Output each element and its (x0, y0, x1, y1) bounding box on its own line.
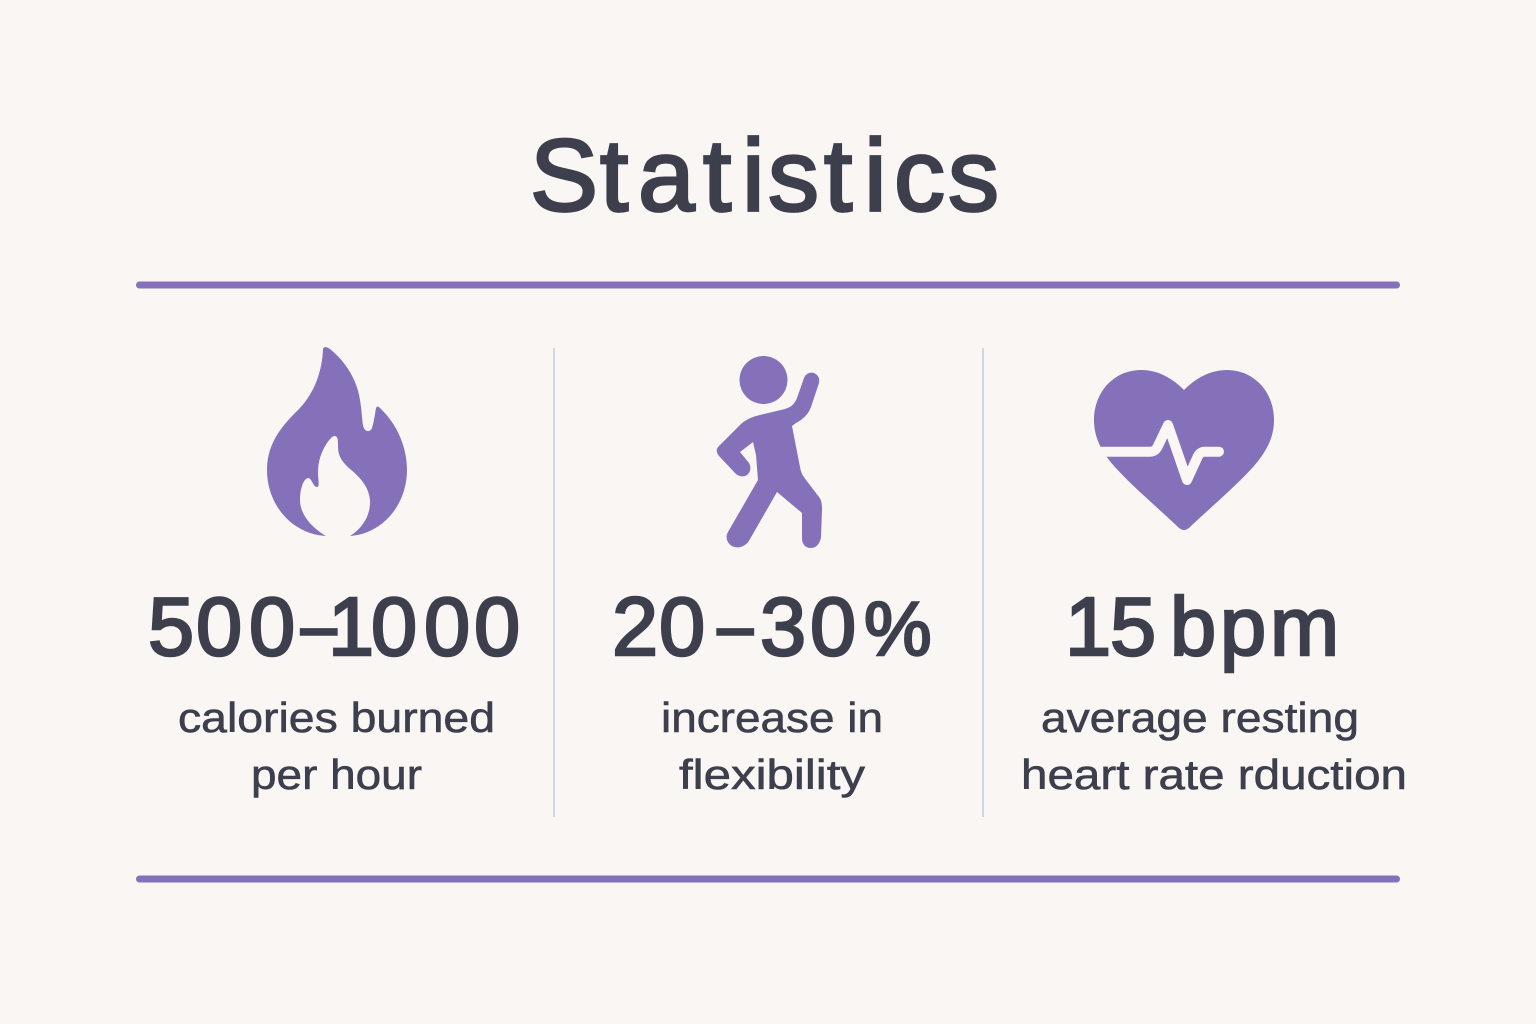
stat value: 500–1000: 1000 (328, 580, 520, 673)
label: calories burned per hour: calories burned (178, 694, 495, 741)
icon: flame (267, 347, 407, 536)
label: calories burned per hour (178, 694, 495, 798)
icon: dancing person (717, 356, 822, 548)
label: calories burned per hour: per hour (251, 751, 422, 798)
label: increase in flexibility: increase in (661, 694, 883, 741)
panel: flexibility (612, 356, 932, 798)
icon: heart with pulse (1094, 370, 1274, 530)
panel: calories (148, 347, 520, 798)
stat value: 20–30%: 20 (612, 580, 705, 673)
label: average resting heart rate rduction: heart rate rduction (1021, 751, 1407, 798)
label: average resting heart rate rduction (1021, 694, 1407, 798)
label: increase in flexibility (661, 694, 883, 798)
title: Statistics (530, 118, 999, 232)
stat value: 15 bpm: bpm (1170, 580, 1339, 673)
stat value: 20–30%: % (864, 587, 932, 672)
stat value: 20–30%: – (718, 592, 753, 662)
stat value: 20–30%: 30 (760, 580, 856, 673)
stat value: 500–1000: 500 (148, 580, 295, 673)
panel: heart rate (1021, 370, 1407, 798)
label: average resting heart rate rduction: average resting (1041, 694, 1359, 741)
stat value: 500–1000: – (302, 592, 336, 662)
stat value: 15 bpm: 15 (1065, 580, 1156, 673)
label: increase in flexibility: flexibility (679, 751, 865, 798)
